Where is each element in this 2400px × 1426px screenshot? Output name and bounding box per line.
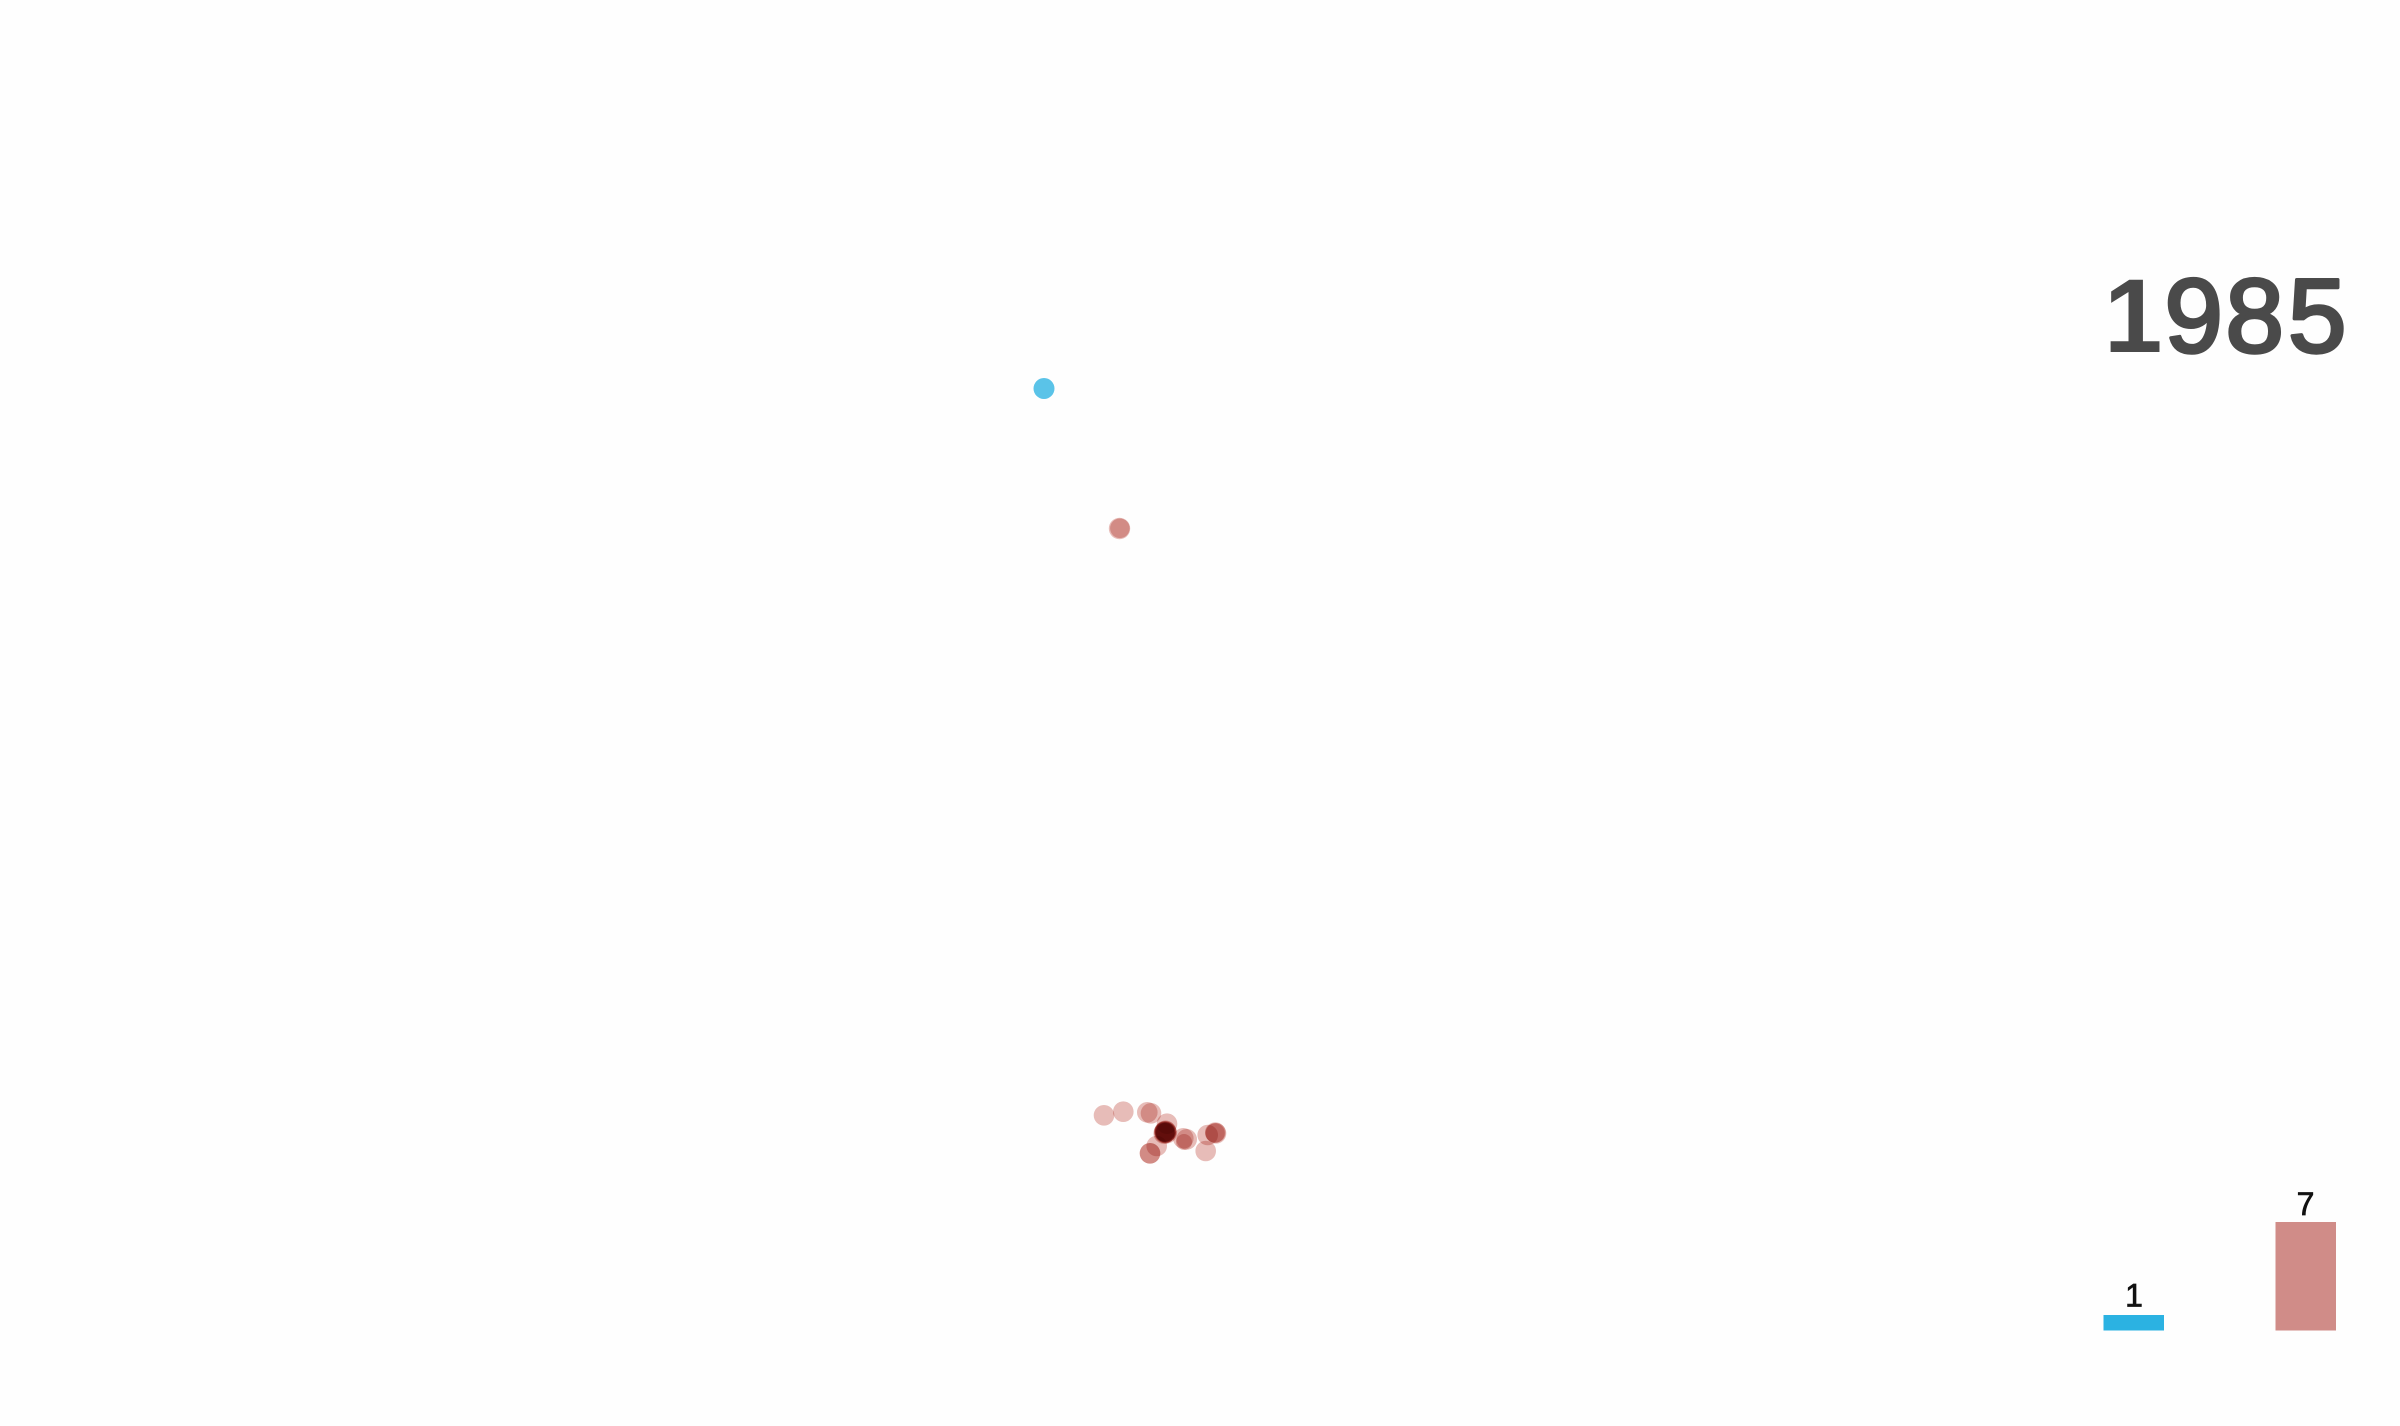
lower red dot cluster [1094, 1101, 1226, 1164]
year label: 1 [2104, 258, 2162, 375]
blue bar with value: 1 [2125, 1278, 2143, 1314]
blue bar with value [2104, 1278, 2164, 1330]
red bar with value: 7 [2297, 1186, 2314, 1222]
red bar with value [2276, 1186, 2336, 1330]
year label: 9 [2164, 258, 2223, 375]
upper red dots [1109, 518, 1130, 539]
year label: 5 [2288, 258, 2346, 375]
year label: 8 [2226, 258, 2284, 375]
blue dot [1034, 378, 1054, 399]
